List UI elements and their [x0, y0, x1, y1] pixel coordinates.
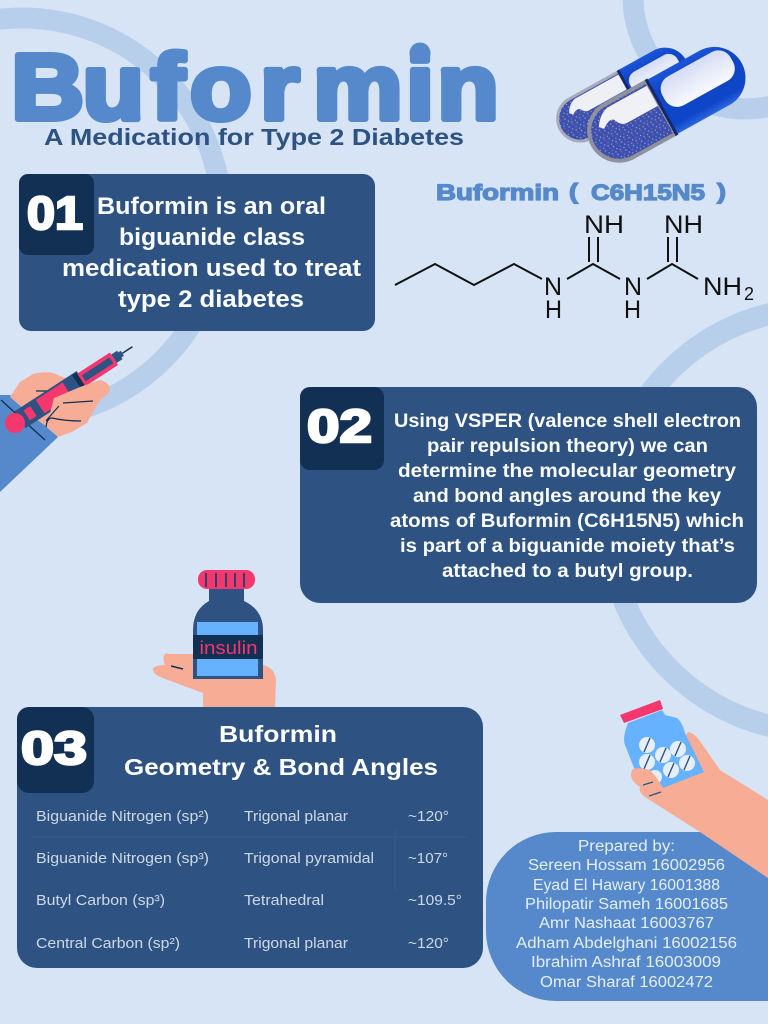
table: bond angles: ~120° — [408, 809, 449, 825]
chemical structure — [395, 211, 754, 324]
text: authors: Omar Sharaf 16002472 — [540, 974, 713, 991]
table: bond angles: Butyl Carbon (sp³) — [36, 893, 165, 909]
text: VSEPR explanation: determine the molecular geometry — [398, 461, 736, 482]
text: authors: Adham Abdelghani 16002156 — [516, 935, 737, 952]
chemical structure: NH — [703, 273, 742, 301]
table: bond angles: Biguanide Nitrogen (sp²) — [36, 809, 209, 825]
chemical structure: NH — [584, 211, 624, 239]
table: bond angles: Tetrahedral — [244, 893, 324, 909]
title: Buformin — [11, 34, 499, 139]
text: authors: Amr Nashaat 16003767 — [539, 915, 714, 932]
text: VSEPR explanation: and bond angles around the key — [413, 486, 721, 507]
text: VSEPR explanation: Using VSPER (valence shell electron — [394, 411, 741, 432]
chemical structure: NH — [664, 211, 703, 239]
table: bond angles: ~107° — [408, 851, 448, 867]
text: authors: Eyad El Hawary 16001388 — [533, 877, 720, 894]
heading: geometry: Buformin — [219, 721, 337, 747]
text: description: Buformin is an oral — [97, 193, 326, 220]
table: bond angles: Trigonal planar — [244, 936, 348, 952]
formula heading: ( — [569, 179, 579, 204]
text: authors — [516, 838, 737, 991]
icon: capsules — [548, 35, 757, 174]
text: authors: Ibrahim Ashraf 16003009 — [531, 954, 721, 971]
heading: geometry: Geometry & Bond Angles — [124, 754, 438, 780]
table: bond angles: Trigonal planar — [244, 809, 348, 825]
icon: hand with insulin pen — [0, 338, 138, 492]
table: bond angles: Trigonal pyramidal — [244, 851, 374, 867]
chemical structure: H — [624, 296, 641, 324]
text: VSEPR explanation: pair repulsion theory) we can — [427, 436, 708, 457]
badge: 01: 01 — [27, 187, 83, 239]
text: description: medication used to treat — [62, 255, 361, 282]
formula heading — [436, 179, 726, 205]
table: bond angles: Central Carbon (sp²) — [36, 936, 180, 952]
text: VSEPR explanation: atoms of Buformin (C6H15N5) which — [390, 511, 744, 532]
badge: 02: 02 — [307, 400, 372, 452]
table: bond angles — [32, 809, 467, 952]
badge: 01 — [19, 174, 94, 255]
icon: hand holding insulin bottle: insulin — [200, 638, 258, 658]
formula heading: C6H15N5 — [591, 180, 705, 205]
chemical structure: 2 — [744, 284, 754, 304]
text: description — [62, 193, 361, 313]
chemical structure: N — [544, 273, 562, 301]
badge: 03: 03 — [21, 722, 87, 774]
text: description: biguanide class — [119, 224, 305, 251]
text: VSEPR explanation: attached to a butyl group. — [442, 561, 693, 582]
formula heading: Buformin — [436, 180, 559, 205]
chemical structure: N — [624, 273, 642, 301]
icon: hand holding pill bottle — [620, 700, 768, 878]
table: bond angles: ~109.5° — [408, 893, 462, 909]
text: authors: Philopatir Sameh 16001685 — [525, 896, 728, 913]
subtitle: A Medication for Type 2 Diabetes — [44, 124, 464, 150]
badge: 03 — [17, 707, 94, 793]
text: description: type 2 diabetes — [118, 286, 304, 313]
heading: geometry — [124, 721, 438, 780]
badge: 02 — [300, 387, 384, 470]
text: VSEPR explanation — [390, 411, 744, 582]
chemical structure: H — [545, 296, 562, 324]
table: bond angles: Biguanide Nitrogen (sp³) — [36, 851, 209, 867]
panel: 01 — [19, 174, 375, 331]
panel: prepared by — [486, 832, 768, 1001]
icon: hand holding insulin bottle — [153, 570, 276, 707]
panel: 02 — [300, 387, 757, 603]
panel: 03 — [17, 707, 483, 968]
text: authors: Prepared by: — [578, 838, 675, 855]
formula heading: ) — [717, 179, 726, 204]
table: bond angles: ~120° — [408, 936, 449, 952]
text: VSEPR explanation: is part of a biguanide moiety that’s — [400, 536, 735, 557]
text: authors: Sereen Hossam 16002956 — [528, 857, 725, 874]
